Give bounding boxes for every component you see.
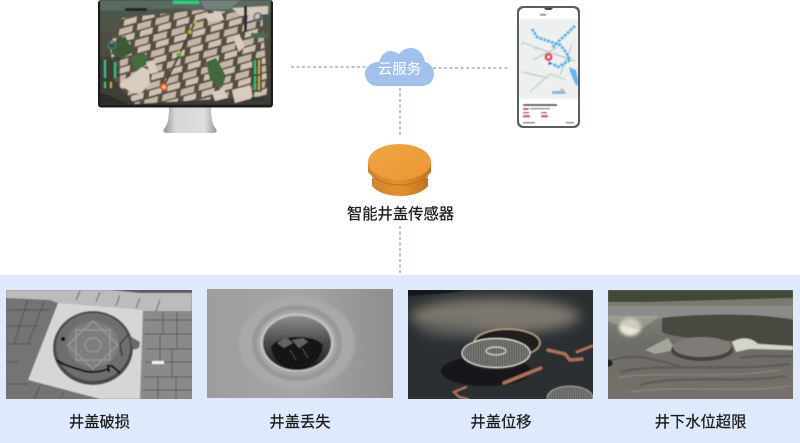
connector: sensor to bottom panel — [399, 226, 401, 275]
bottom panel background — [0, 275, 800, 443]
label: displaced cover: 井盖位移 — [470, 414, 532, 431]
photo: broken manhole cover — [6, 290, 192, 399]
connector: monitor to cloud — [291, 66, 366, 68]
monitor stand — [163, 107, 217, 133]
photo: displaced manhole cover — [408, 290, 593, 410]
phone map — [519, 14, 579, 126]
label: broken cover: 井盖破损 — [69, 414, 130, 431]
sensor label: 智能井盖传感器 — [347, 205, 454, 223]
photo: missing manhole cover — [207, 289, 393, 398]
cloud label: 云服务 — [378, 61, 421, 78]
connector: cloud to sensor — [399, 88, 401, 138]
icon: orange smart sensor — [368, 144, 431, 196]
icon: smartphone with map app — [517, 6, 580, 128]
icon: desktop monitor with 3D city — [98, 0, 273, 133]
icon: cloud service — [365, 48, 434, 86]
label: missing cover: 井盖丢失 — [269, 414, 331, 431]
connector: cloud to phone — [433, 67, 508, 69]
asphalt grain texture — [264, 324, 330, 370]
label: water level over limit: 井下水位超限 — [655, 414, 746, 431]
monitor screen: city map — [100, 0, 271, 105]
photo: overflowing water around manhole — [606, 290, 793, 399]
